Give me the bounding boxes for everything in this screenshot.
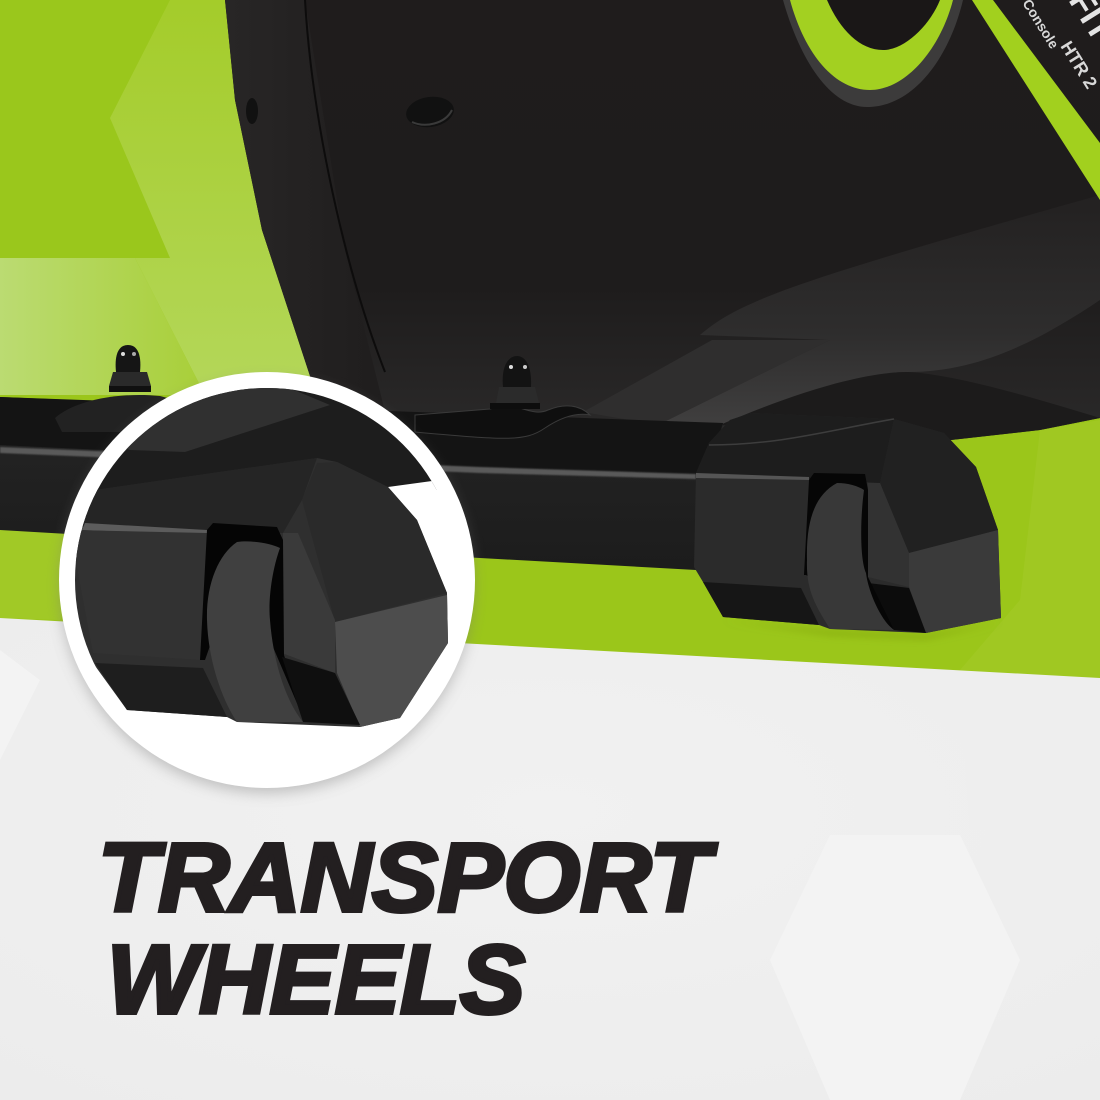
mounting plate right xyxy=(415,406,590,438)
magnifier circle callout xyxy=(59,372,475,800)
magnified wheel xyxy=(207,541,303,722)
bolt right xyxy=(490,356,540,409)
frame bar xyxy=(0,345,723,570)
green background xyxy=(0,0,1100,700)
bike console body xyxy=(225,0,1100,440)
title: transport wheels xyxy=(98,823,718,1034)
panel seam xyxy=(305,0,385,372)
bolt left xyxy=(109,345,151,392)
body lower swoosh xyxy=(583,195,1100,440)
console label text xyxy=(1019,0,1100,92)
magnified caster xyxy=(75,388,448,727)
right wheel xyxy=(807,483,894,630)
title: transport wheels: WHEELS xyxy=(107,925,525,1034)
title: transport wheels: TRANSPORT xyxy=(98,823,718,932)
mounting plate left xyxy=(55,395,175,432)
screw hole xyxy=(404,94,456,130)
right caster wheel housing xyxy=(694,413,1001,638)
green logo ring xyxy=(783,0,963,107)
white lower panel xyxy=(0,618,1100,1100)
console label text: HTR 2 xyxy=(1057,38,1100,92)
side hole xyxy=(246,98,258,124)
green stripe xyxy=(972,0,1100,200)
